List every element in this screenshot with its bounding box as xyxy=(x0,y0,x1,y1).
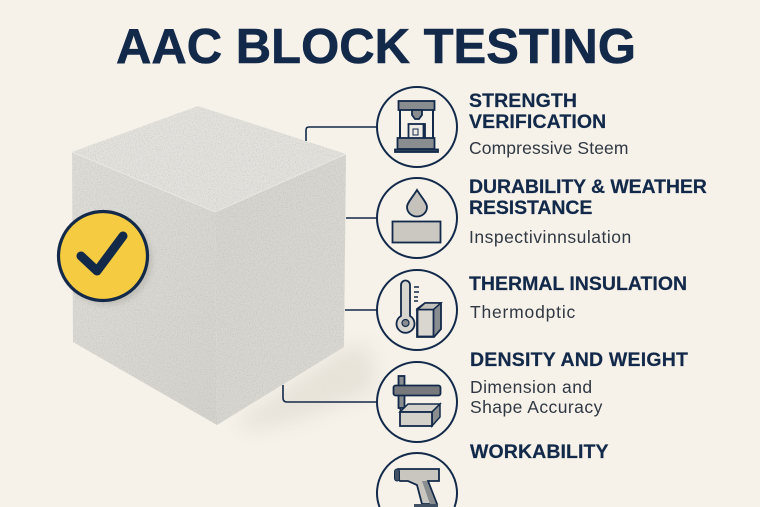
connector lines xyxy=(283,127,378,402)
heading: workability: WORKABILITY xyxy=(470,441,609,463)
text: thermodptic: Thermodptic xyxy=(470,302,576,322)
title: AAC BLOCK TESTING xyxy=(116,20,636,74)
heading: strength verification: VERIFICATION xyxy=(469,110,606,132)
icon: thermometer and block xyxy=(377,270,457,350)
icon: measuring tool and block xyxy=(377,362,457,442)
heading: thermal insulation: THERMAL INSULATION xyxy=(469,273,687,295)
check badge xyxy=(58,212,152,305)
icon: water drop xyxy=(377,178,457,258)
heading: density and weight: DENSITY AND WEIGHT xyxy=(470,349,688,371)
heading: durability: RESISTANCE xyxy=(469,197,592,219)
text: inspection: Inspectivinnsulation xyxy=(469,227,632,247)
icon: drill xyxy=(377,453,457,507)
text: dimension and shape accuracy xyxy=(470,377,603,417)
text: compressive: Compressive Steem xyxy=(469,138,629,158)
icon: press xyxy=(377,87,457,167)
text: dimension and shape accuracy: Shape Accuracy xyxy=(470,397,603,417)
heading: durability xyxy=(469,176,707,219)
text: dimension and shape accuracy: Dimension and xyxy=(470,377,593,397)
heading: strength verification xyxy=(469,90,606,132)
block xyxy=(72,106,346,425)
heading: strength verification: STRENGTH xyxy=(469,90,577,112)
heading: durability: DURABILITY & WEATHER xyxy=(469,176,707,198)
cube shadow xyxy=(232,345,376,430)
